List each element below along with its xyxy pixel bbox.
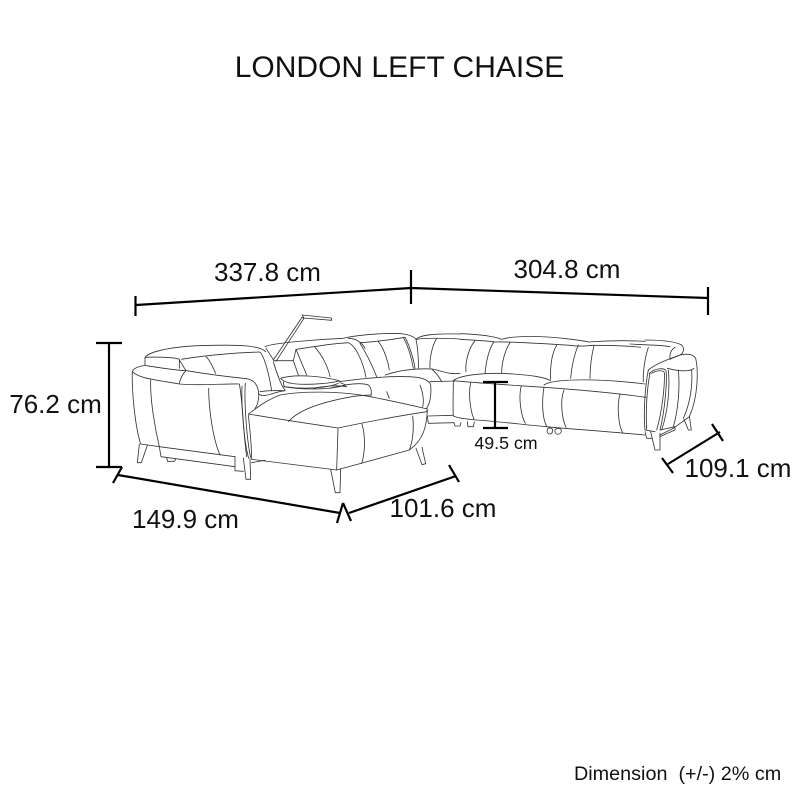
- floor lamp: [273, 317, 304, 361]
- dimension: height 76.2 cm: 76.2 cm: [9, 389, 102, 419]
- dimension: depth 109.1 cm: 109.1 cm: [685, 453, 791, 483]
- dimension: chaise width 101.6 cm: [343, 465, 496, 523]
- right arm of sofa: [630, 340, 697, 450]
- dimension: depth 109.1 cm: [662, 424, 791, 483]
- dimension: overall left width 337.8 cm: [136, 257, 411, 316]
- left section of sofa: arm, chaise and lamp: [132, 315, 427, 493]
- dimension: chaise width 101.6 cm: 101.6 cm: [390, 493, 496, 523]
- dimension: chaise side 149.9 cm: 149.9 cm: [132, 504, 239, 534]
- title: LONDON LEFT CHAISE: [235, 51, 564, 84]
- dimension: seat height 49.5 cm: [474, 382, 538, 453]
- dimension: overall right width 304.8 cm: [411, 254, 708, 315]
- console table: [281, 376, 339, 384]
- dimension: seat height 49.5 cm: 49.5 cm: [474, 433, 538, 453]
- chaise cushion and base: [248, 392, 427, 428]
- dimension: height 76.2 cm: [9, 343, 122, 467]
- footnote: dimension tolerance: Dimension (+/-) 2% cm: [574, 763, 781, 785]
- seat: [339, 377, 431, 408]
- console niche: [266, 348, 307, 375]
- centre section of sofa: backrests, seat and console: [260, 334, 460, 408]
- dimension: chaise side 149.9 cm: [113, 467, 343, 534]
- right section of sofa: seats and backrests: [427, 334, 646, 435]
- sofa line drawing: [132, 315, 697, 493]
- dimension: overall left width 337.8 cm: 337.8 cm: [214, 257, 321, 287]
- dimension: overall right width 304.8 cm: 304.8 cm: [514, 254, 620, 284]
